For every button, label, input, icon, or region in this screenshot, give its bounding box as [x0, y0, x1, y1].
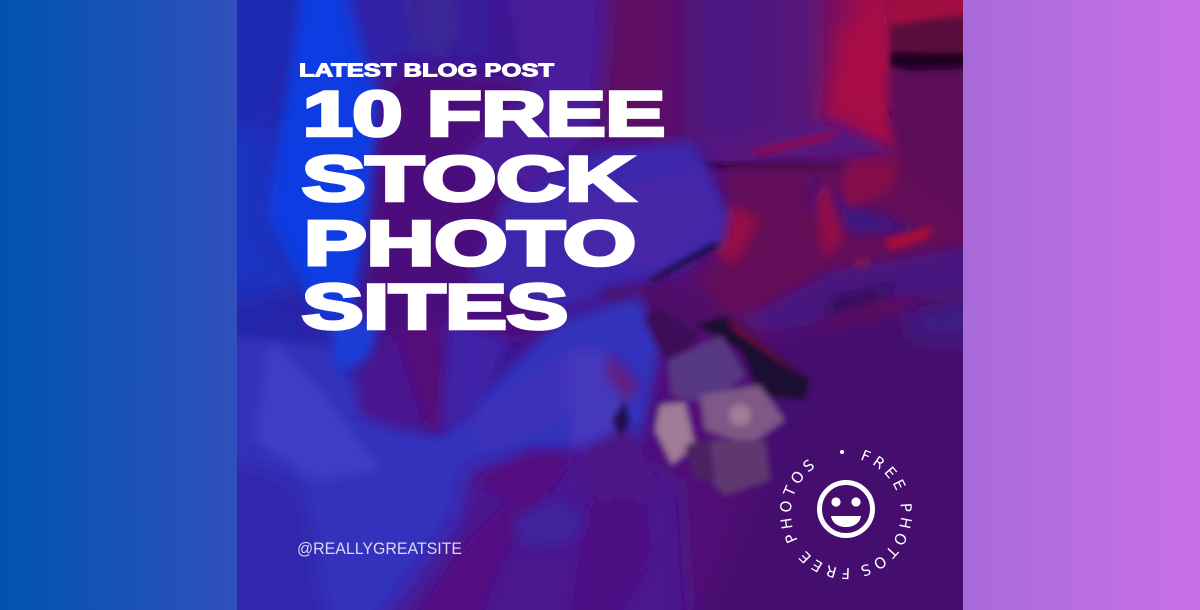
small red accent and dark gap: [606, 352, 640, 402]
badge ring text: FREE PHOTOS: [780, 460, 849, 580]
website handle: @REALLYGREATSITE: [297, 539, 462, 558]
sleeve tip near foot: [330, 320, 380, 372]
badge ring text: [780, 450, 912, 580]
magenta fold sweeping to bottom: [370, 450, 690, 610]
headline: 10 FREE: [303, 80, 665, 150]
hand: [403, 0, 456, 68]
right upper corner: [885, 0, 963, 28]
leg / knee: [470, 140, 728, 310]
sleeve bright blue: [262, 0, 378, 320]
badge dot: [840, 450, 844, 454]
kicker: latest blog post: LATEST BLOG POST: [299, 60, 554, 80]
headline: PHOTO: [304, 209, 636, 279]
headline: SITES: [302, 272, 568, 342]
headline: STOCK: [302, 144, 634, 214]
bare foot: [355, 320, 460, 432]
circular badge: [780, 450, 912, 580]
lower left sheet: [200, 295, 660, 610]
pillow: [640, 0, 905, 165]
flowers: [645, 305, 810, 495]
right gradient band: [963, 0, 1200, 610]
headline: [302, 80, 665, 342]
background photo: bed sheets: [200, 0, 1000, 610]
lower right: [690, 295, 1000, 610]
shirt bottom dark below: [600, 280, 720, 360]
left gradient band: [0, 0, 237, 610]
sleeve purple: [460, 0, 620, 190]
mid-right sheet: [690, 160, 1000, 340]
main poster: [237, 0, 963, 610]
badge ring text: FREE PHOTOS: [861, 450, 912, 576]
centre dark column: [360, 60, 560, 350]
icon: smiley face: [820, 482, 872, 536]
